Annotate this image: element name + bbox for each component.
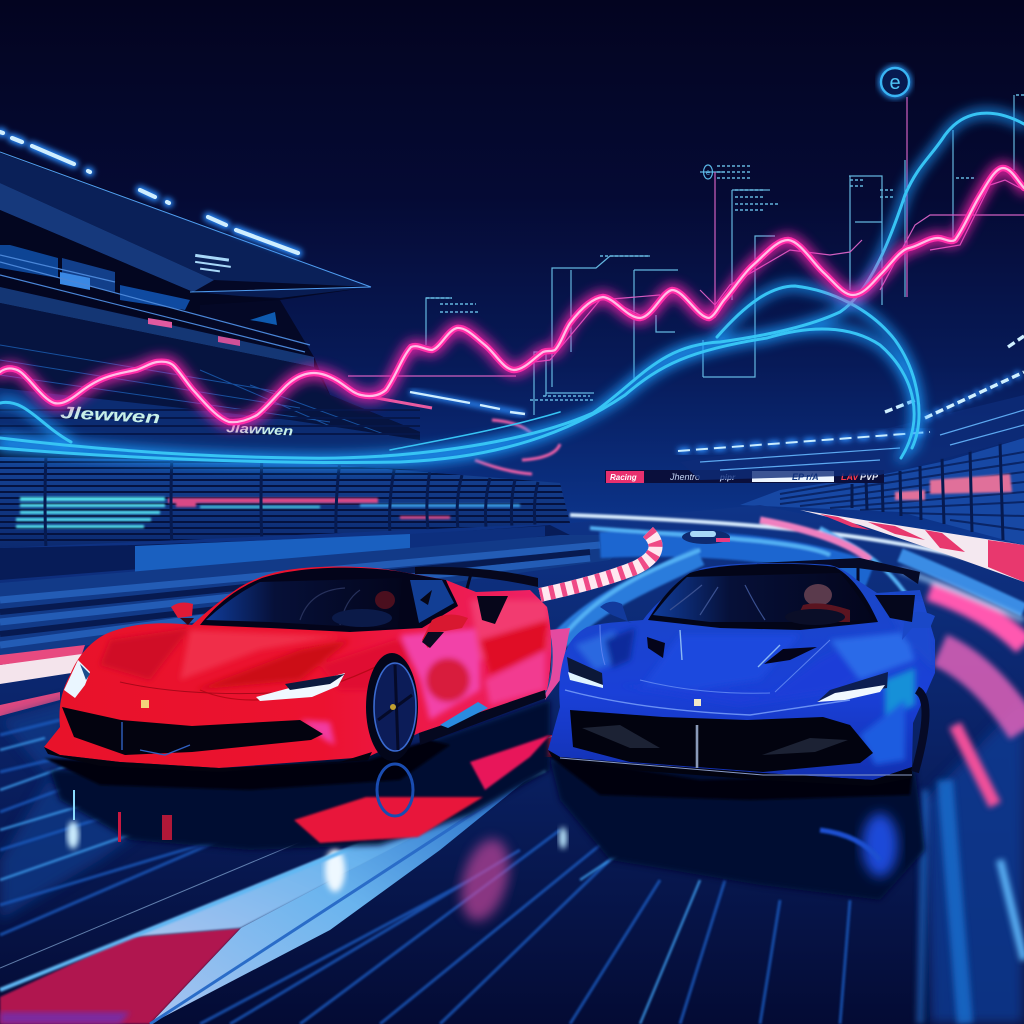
blue car: front intake (570, 710, 873, 772)
red car: front wheel (366, 653, 418, 761)
blue car: grille mesh (582, 725, 848, 755)
chart: magenta neon performance line (0, 168, 1024, 422)
stadium sign: left: Jlawwen (226, 420, 294, 439)
red car: mirrors (171, 603, 468, 648)
panel: race track surface (0, 505, 1024, 1024)
red car: side sill (419, 690, 546, 745)
blue car: roof and windshield (648, 564, 878, 630)
blue car: rear wing (757, 558, 920, 584)
blue car: paint highlights (565, 595, 935, 765)
blue car: rear side intake (875, 595, 915, 622)
stadium sign: left (60, 403, 294, 439)
red car: roof and windshield (200, 568, 458, 632)
sponsor banner: Jhentro (669, 472, 700, 482)
icon: circled e marker (881, 68, 909, 96)
red car: splitter (44, 747, 372, 772)
sponsor banner (605, 470, 884, 483)
sponsor banner: PVP (860, 472, 879, 482)
panel: right fence (740, 438, 1024, 545)
panel: grandstand (0, 150, 420, 470)
foreground racing stripe (0, 735, 555, 1024)
blue car: badge and trident (694, 699, 701, 768)
sponsor banner: pipr (719, 473, 736, 482)
red car: paint highlights (100, 600, 548, 745)
blue car: splitter (548, 750, 912, 786)
red car: rear wing (415, 567, 538, 592)
red car: rear wheel (522, 615, 552, 699)
red sports car (44, 566, 552, 772)
sponsor banner: EP r/A (792, 472, 819, 482)
blue car: mirrors (600, 602, 935, 640)
red car: body (44, 566, 551, 768)
stadium sign: left: Jlewwen (60, 403, 161, 427)
track motion streaks (0, 570, 1024, 1024)
red car: intake fins (122, 722, 190, 755)
chart: cyan neon trend lines (0, 113, 1024, 462)
blue car: headlights (567, 657, 888, 702)
red car: front intake (62, 707, 323, 755)
night sky background (0, 0, 1024, 560)
blue sports car (548, 558, 935, 786)
blue car: right wheel edge (915, 690, 926, 772)
red car: headlights (64, 660, 345, 701)
icon: circled e marker: e (889, 72, 901, 94)
kerb: right checker (800, 510, 1024, 582)
chart: thin magenta traces (348, 97, 1024, 376)
icon: small chart marker: e (706, 168, 711, 177)
icon: stadium roof lights (0, 132, 298, 253)
chart: annotation lines (426, 95, 1024, 415)
icon: small chart marker (704, 165, 712, 179)
sponsor banner: LAV (841, 472, 859, 482)
panel: left fence (0, 455, 570, 550)
left mid lights (360, 392, 560, 474)
sponsor banner: Racing (610, 473, 637, 482)
distant car (682, 530, 730, 544)
blue car: body (548, 563, 935, 780)
car shadows and reflections (44, 700, 925, 900)
far stand and lights: right (678, 336, 1024, 480)
blue car: hood vents (647, 630, 817, 667)
red car: side air intake (477, 596, 508, 624)
red car: badge (141, 700, 149, 708)
